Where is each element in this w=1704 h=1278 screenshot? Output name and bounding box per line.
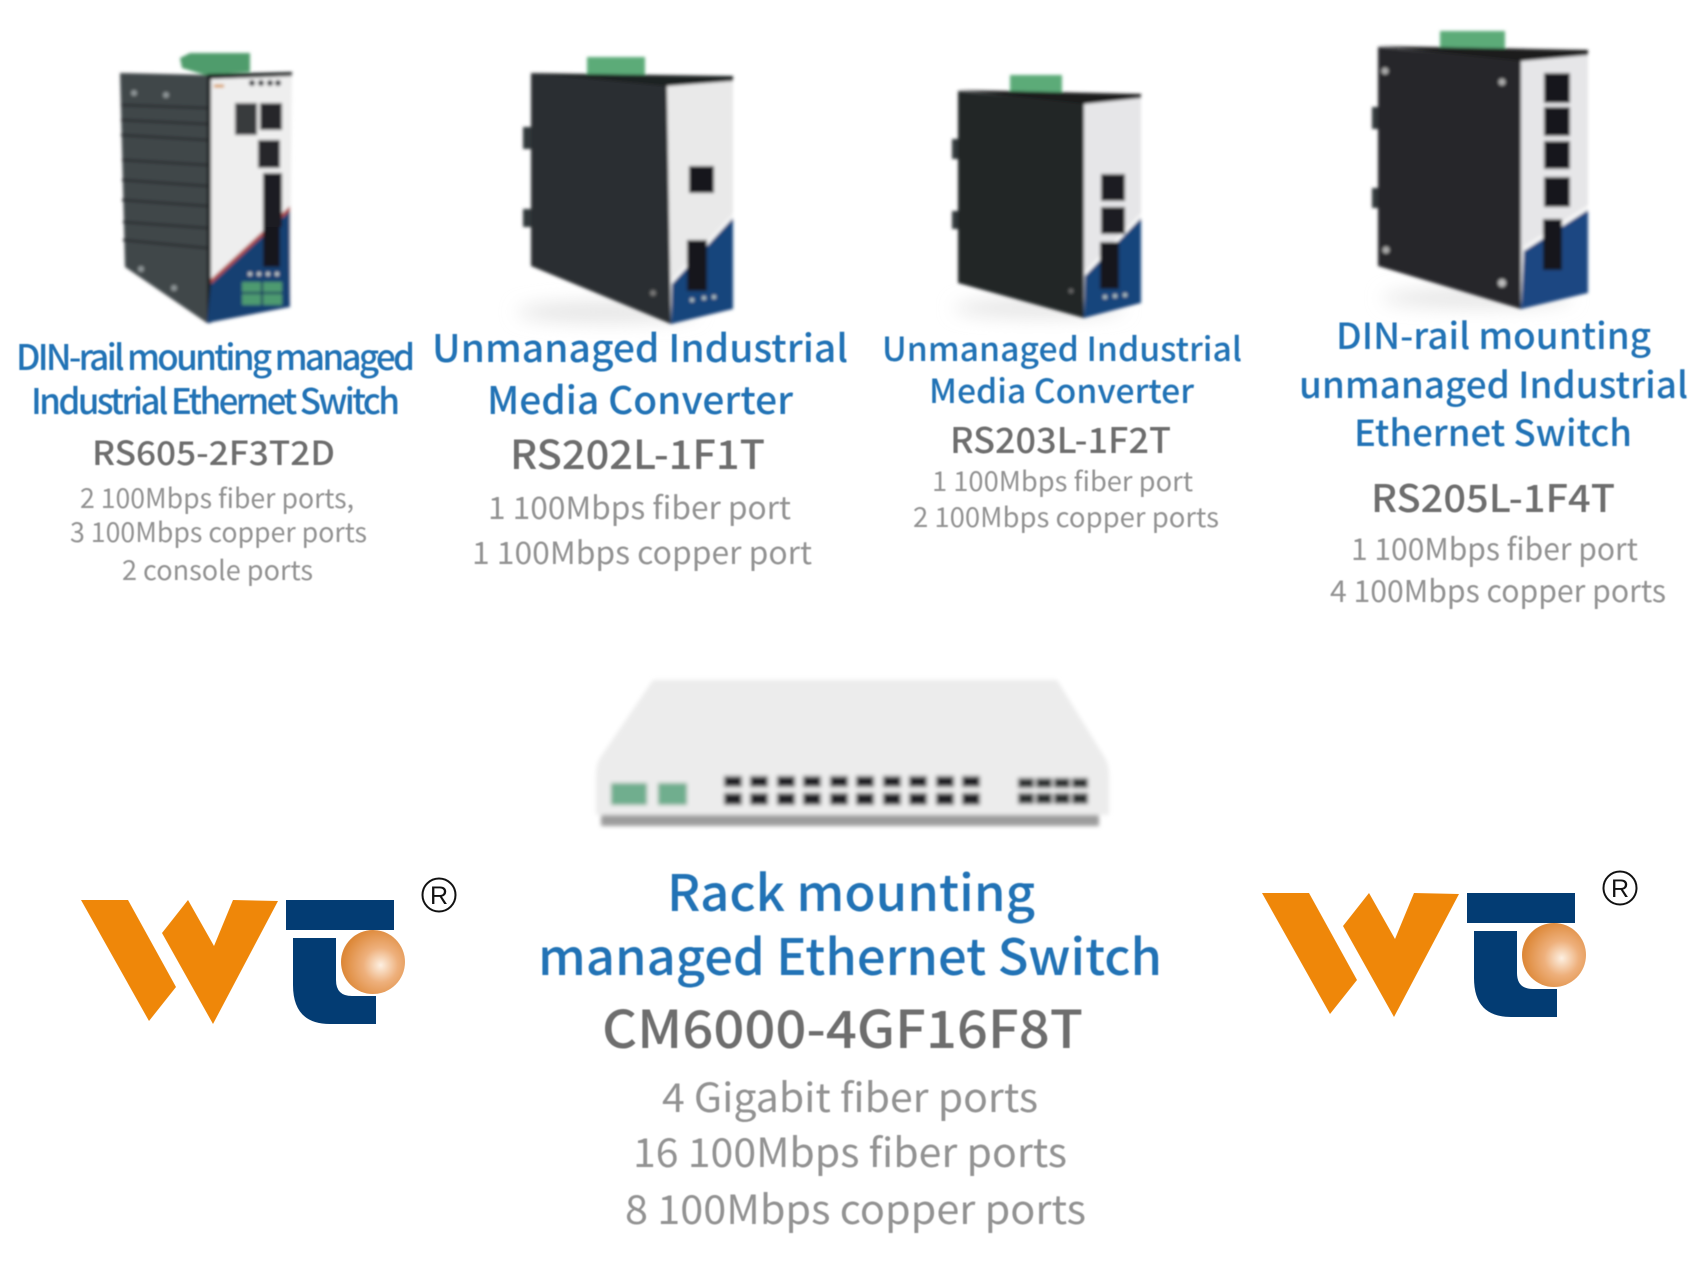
model: CM6000-4GF16F8T: CM6000-4GF16F8T [602,988,1083,1063]
title: col 3: Unmanaged Industrial [882,323,1242,371]
title: col 2: Unmanaged Industrial [432,318,848,373]
specs: col 2: 1 100Mbps copper port [472,528,812,573]
title: col 1: Industrial Ethernet Switch [31,374,400,425]
port group: 4 columns [1018,778,1088,804]
specs: col 1 [70,477,367,588]
specs: col 1: 2 100Mbps fiber ports, [80,477,354,516]
logo: WT right [1262,872,1636,1017]
device: RS605-2F3T2D [120,53,292,323]
port group: 10 columns [724,776,980,805]
device: RS205L-1F4T [1372,31,1588,309]
title: col 2 [432,318,848,425]
specs: col 1: 2 console ports [122,549,313,588]
title: col 1: DIN-rail mounting managed [16,330,415,381]
green terminal blocks [611,783,687,805]
specs: col 4: 4 100Mbps copper ports [1330,567,1666,611]
title: col 3: Media Converter [929,365,1194,413]
model: RS202L-1F1T: RS202L-1F1T [510,423,765,481]
title: rack: Rack mounting [667,854,1035,926]
title: col 1 [16,330,415,425]
specs: rack: 8 100Mbps copper ports [625,1178,1086,1236]
specs: col 3: 2 100Mbps copper ports [913,496,1219,535]
device: RS202L-1F1T [517,57,733,324]
ports [235,103,282,168]
device: CM6000 rack switch [596,680,1109,826]
title: rack: managed Ethernet Switch [538,918,1162,990]
title: rack [538,854,1162,990]
specs: col 3: 1 100Mbps fiber port [932,460,1193,499]
specs: col 2: 1 100Mbps fiber port [488,483,791,528]
specs: col 1: 3 100Mbps copper ports [70,511,367,550]
specs: rack [625,1066,1086,1236]
logo: WT left: R [430,882,448,910]
title: col 3 [882,323,1242,413]
title: col 2: Media Converter [487,370,793,425]
specs: rack: 4 Gigabit fiber ports [662,1066,1038,1124]
specs: col 3 [913,460,1219,535]
logo: WT left [81,878,456,1024]
title: col 4: unmanaged Industrial [1299,357,1688,409]
specs: col 4 [1330,525,1666,611]
device: RS203L-1F2T [952,75,1141,318]
specs: col 4: 1 100Mbps fiber port [1351,525,1638,569]
title: col 4: DIN-rail mounting [1336,308,1651,360]
model: RS605-2F3T2D: RS605-2F3T2D [92,427,335,475]
specs: rack: 16 100Mbps fiber ports [633,1121,1067,1179]
model: RS205L-1F4T: RS205L-1F4T [1371,468,1615,523]
model: RS203L-1F2T: RS203L-1F2T [950,413,1171,464]
logo: WT right: R [1611,875,1629,903]
title: col 4: Ethernet Switch [1354,405,1632,457]
specs: col 2 [472,483,812,573]
title: col 4 [1299,308,1688,457]
